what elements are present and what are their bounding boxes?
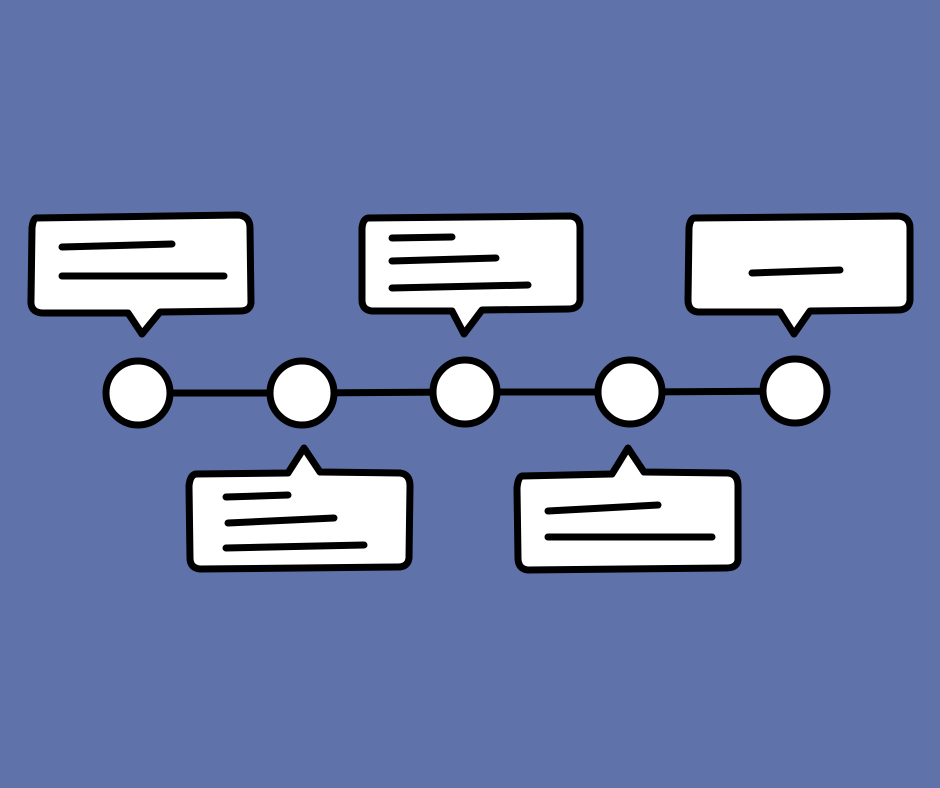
- connector line: [138, 391, 795, 393]
- timeline node 4: [598, 360, 662, 424]
- bubble 2 (top): [362, 216, 580, 334]
- timeline node 2: [270, 361, 334, 425]
- bubble 5 (bottom): [517, 448, 738, 570]
- timeline node 5: [763, 359, 827, 423]
- bubble 1 (top): [31, 215, 251, 334]
- timeline node 1: [106, 361, 170, 425]
- timeline node 3: [433, 360, 497, 424]
- bubble 3 (top): [688, 216, 910, 334]
- bubble 4 (bottom): [189, 448, 410, 569]
